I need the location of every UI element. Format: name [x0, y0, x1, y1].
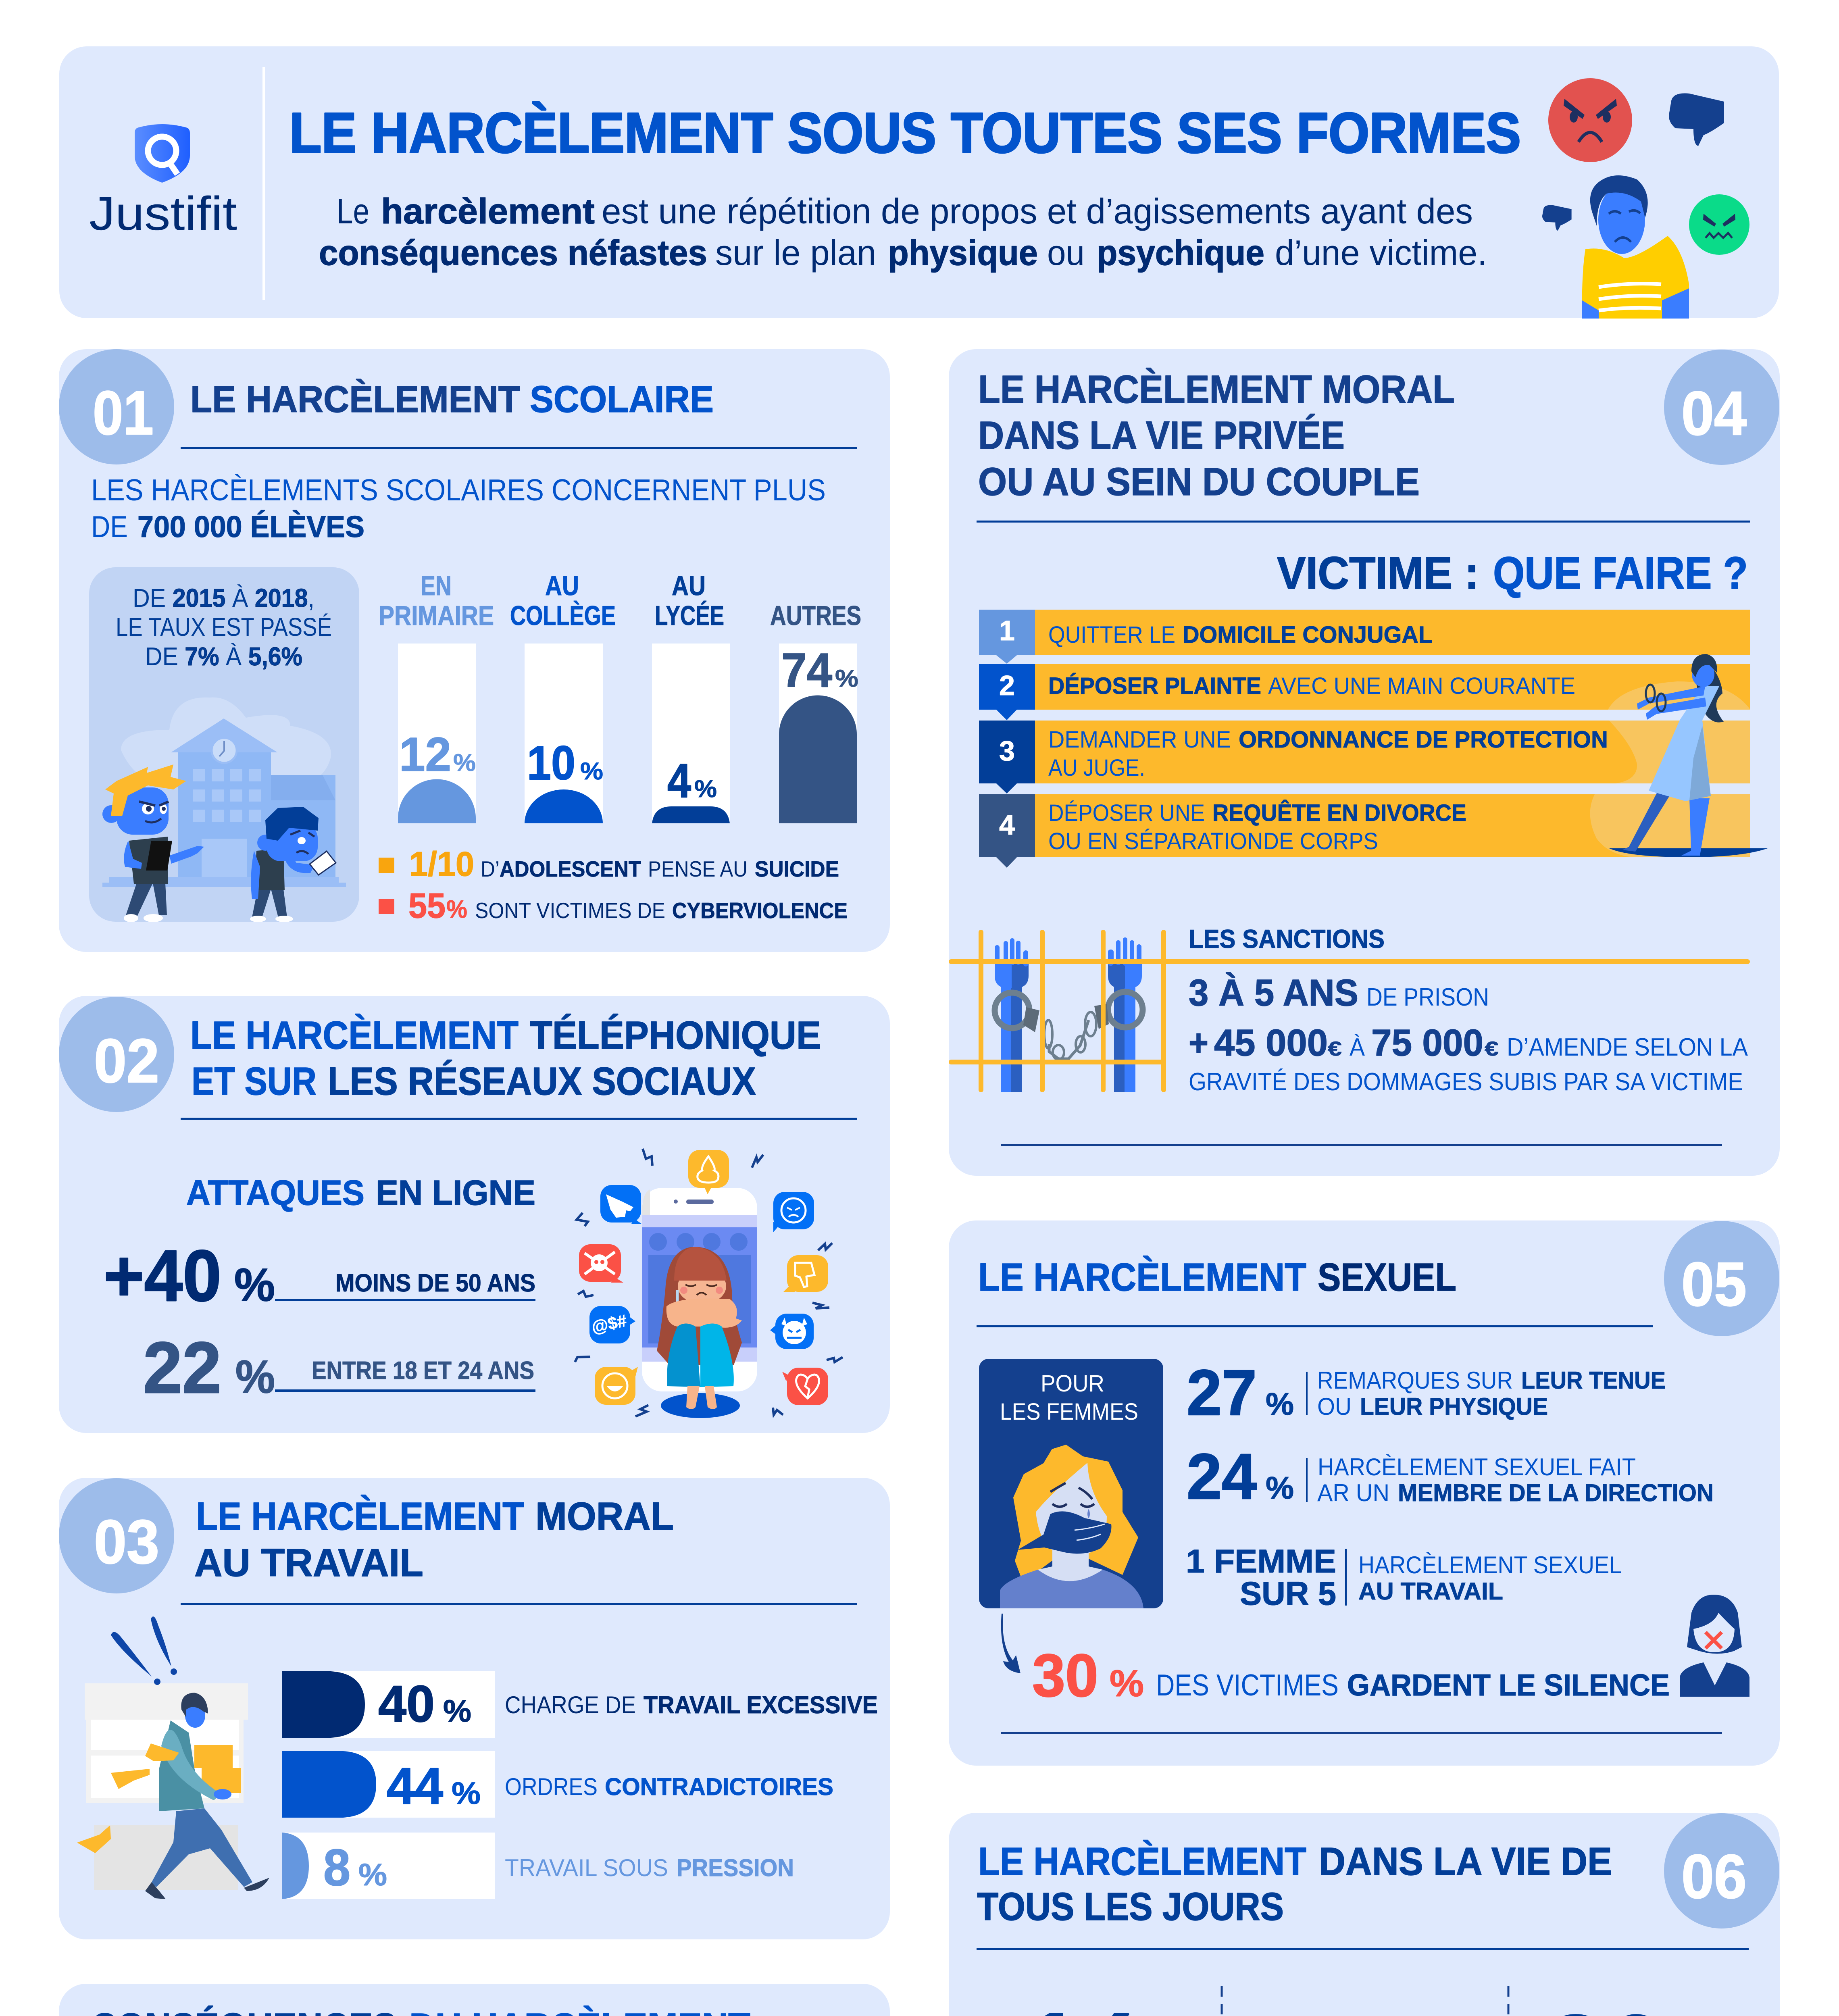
icon: shield: [135, 124, 190, 183]
step 4 text: [1048, 800, 1466, 854]
number badge 06: [1664, 1813, 1779, 1929]
panel 02: téléphonique et réseaux sociaux: [59, 996, 890, 1433]
intro text: physique: [888, 233, 1038, 273]
stat: 22%: 22: [143, 1327, 221, 1408]
heading: AU TRAVAIL: [194, 1541, 423, 1585]
step 4: [979, 794, 1750, 868]
stat: 22%: ENTRE 18 ET 24 ANS: [312, 1357, 534, 1385]
sanctions text: €: [1328, 1037, 1342, 1060]
logo: Justifit: [89, 124, 237, 240]
stat: 1/10: 1/10: [409, 845, 474, 883]
step 4 text: REQUÊTE EN DIVORCE: [1212, 800, 1466, 826]
text: 2015 à 2018: DE 2015 À 2018,: [133, 583, 314, 612]
figure: man: [145, 1693, 269, 1899]
intro text: sur le plan: [715, 233, 876, 273]
flying papers: [77, 1743, 179, 1853]
bar: primaire: PRIMAIRE: [379, 600, 494, 631]
stat: 1 femme sur 5: AU TRAVAIL: [1358, 1578, 1503, 1605]
card: taux: [89, 567, 359, 922]
step 3 text: DEMANDER UNE: [1048, 727, 1231, 753]
bar: lycée: 4: [667, 754, 691, 808]
logo: Justifit: Justifit: [89, 187, 237, 240]
intro text: psychique: [1097, 233, 1264, 273]
heading: DANS LA VIE PRIVÉE: [978, 413, 1345, 457]
heading: [91, 2005, 750, 2016]
stat: 30% silence: DES VICTIMES: [1156, 1668, 1339, 1702]
heading: TOUS LES JOURS: [977, 1885, 1284, 1929]
card: pour les femmes: POUR: [1041, 1370, 1104, 1397]
heading: victime que faire: [1277, 548, 1748, 598]
stat: 27%: REMARQUES SUR: [1317, 1367, 1513, 1394]
bar: 44%: ORDRES: [505, 1773, 598, 1800]
heading: [190, 378, 714, 420]
intro text: Le: [337, 191, 369, 231]
sanctions text: [1189, 924, 1748, 1096]
number badge 03: [59, 1478, 174, 1593]
bubble: broken heart: [782, 1368, 828, 1405]
stat: 22%: [143, 1327, 535, 1408]
intro text: DE: [91, 510, 128, 544]
stat: 1 femme sur 5: [1186, 1543, 1622, 1612]
number badge 04: [1664, 350, 1779, 465]
stat: 1 femme sur 5: 1 FEMME: [1186, 1543, 1336, 1580]
stat: 24%: AR UN: [1317, 1479, 1389, 1506]
sanctions text: GRAVITÉ DES DOMMAGES SUBIS PAR SA VICTIME: [1189, 1068, 1743, 1096]
step 1: [979, 610, 1750, 664]
illustration: overwhelmed worker: [77, 1616, 269, 1899]
bar: 40%: CHARGE DE: [505, 1691, 636, 1718]
bar: 40%: 40: [378, 1675, 435, 1733]
card: pour les femmes: LES FEMMES: [1000, 1399, 1138, 1425]
stat: 27%: LEUR PHYSIQUE: [1360, 1393, 1548, 1420]
intro text: LES HARCÈLEMENTS SCOLAIRES CONCERNENT PLUS: [91, 473, 826, 507]
text: 2015 à 2018: [116, 583, 332, 671]
heading: attaques en ligne: [186, 1173, 535, 1212]
number badge 01: 01: [93, 378, 154, 448]
intro text: conséquences néfastes: [319, 233, 707, 273]
icon: angry red face: [1548, 78, 1632, 162]
handcuffs: [995, 992, 1143, 1060]
panel 01: harcèlement scolaire: [59, 349, 890, 952]
panel 06: vie de tous les jours: [949, 1813, 1780, 2016]
heading: attaques en ligne: EN LIGNE: [376, 1173, 535, 1212]
stat: 1/10: PENSE AU: [648, 856, 748, 881]
prison bars: [949, 930, 1750, 1092]
stat: 24%: 24: [1187, 1440, 1257, 1512]
bar: 40%: TRAVAIL EXCESSIVE: [644, 1691, 878, 1718]
bar: 8%: PRESSION: [677, 1854, 794, 1881]
number badge 05: [1664, 1221, 1779, 1336]
number badge 01: [59, 349, 174, 464]
sanctions text: 75 000: [1371, 1022, 1483, 1064]
bar: autres: %: [835, 665, 858, 692]
step 4 text: OU EN SÉPARATIONDE CORPS: [1048, 828, 1378, 854]
stat: 55%: SONT VICTIMES DE: [475, 898, 665, 923]
intro text: harcèlement: [381, 191, 595, 231]
window and shelf: [85, 1683, 248, 1890]
stat: 22%: %: [235, 1351, 275, 1403]
panel 04: vie privée et couple: [949, 349, 1780, 1176]
stat: +40%: +40: [104, 1235, 221, 1316]
bubble: devil: [770, 1314, 814, 1349]
number badge 05: 05: [1681, 1250, 1747, 1319]
bar: 8%: TRAVAIL SOUS: [505, 1854, 668, 1881]
number badge 02: 02: [94, 1026, 159, 1095]
heading: LE HARCÈLEMENT: [978, 1255, 1306, 1299]
heading: victime que faire: QUE FAIRE ?: [1493, 548, 1748, 598]
stat: 24%: HARCÈLEMENT SEXUEL FAIT: [1318, 1454, 1636, 1481]
sanctions text: 3 À 5 ANS: [1189, 972, 1358, 1014]
bar: 44%: %: [452, 1776, 481, 1811]
bar: primaire: 12: [399, 728, 451, 781]
bar: 40%: %: [443, 1694, 471, 1729]
heading: [978, 367, 1455, 504]
illustration: silenced woman: [1000, 1445, 1143, 1608]
step 3: [979, 721, 1750, 793]
step 3 text: [1048, 727, 1608, 781]
bubble: angry face: [773, 1192, 814, 1232]
illustration: girl in phone: [575, 1149, 843, 1418]
number badge 04: 04: [1681, 379, 1747, 448]
step 3: 3: [999, 735, 1015, 766]
illustration: handcuffed hands behind bars: [949, 930, 1750, 1092]
chart: bars by school level: [379, 571, 861, 823]
exclamation marks: [111, 1616, 177, 1685]
step 2 text: [1048, 673, 1575, 699]
title: LE HARCÈLEMENT SOUS TOUTES SES FORMES: [289, 101, 1521, 165]
bar: collège: COLLÈGE: [510, 600, 616, 631]
bar: 8%: [282, 1833, 794, 1899]
panel: header: [59, 46, 1779, 319]
sanctions text: D’AMENDE SELON LA: [1507, 1033, 1748, 1061]
stat: 1 femme sur 5: HARCÈLEMENT SEXUEL: [1358, 1552, 1622, 1579]
heading: MORAL: [535, 1494, 674, 1538]
bar: autres: AUTRES: [770, 600, 861, 631]
text: 2015 à 2018: DE 7% À 5,6%: [145, 642, 302, 671]
stat: 55%: %: [446, 896, 467, 923]
stat: 1 femme sur 5: SUR 5: [1240, 1575, 1336, 1612]
bar: autres: 74: [781, 644, 832, 697]
intro text: 700 000 ÉLÈVES: [137, 510, 364, 544]
bar: lycée: AU: [672, 571, 706, 601]
bar: lycée: LYCÉE: [655, 600, 724, 631]
number badge 03: 03: [94, 1507, 159, 1577]
bar: 40%: [282, 1671, 878, 1738]
illustration: sad man: [1582, 175, 1689, 319]
bar: collège: 10: [527, 736, 575, 790]
heading: SCOLAIRE: [530, 378, 714, 420]
stat: 24%: MEMBRE DE LA DIRECTION: [1398, 1479, 1714, 1506]
stat: 30% silence: GARDENT LE SILENCE: [1347, 1668, 1670, 1702]
step 2 text: DÉPOSER PLAINTE: [1048, 673, 1261, 699]
heading: [977, 1839, 1612, 1929]
heading: TÉLÉPHONIQUE: [530, 1013, 821, 1057]
sanctions text: À: [1350, 1033, 1365, 1061]
bubble: swear symbols: @$#: [590, 1311, 629, 1337]
bar: primaire: EN: [421, 571, 452, 601]
bubble: poop: [688, 1150, 729, 1194]
step 4: 4: [999, 809, 1015, 841]
arrow: [1001, 1614, 1021, 1673]
bar: primaire: %: [453, 749, 476, 776]
number badge 06: 06: [1681, 1842, 1747, 1911]
icon: small thumbs down: [1542, 205, 1572, 231]
card: pour les femmes: [979, 1359, 1163, 1608]
heading: LE HARCÈLEMENT: [978, 1839, 1306, 1883]
bubble: thumbs down: [783, 1255, 828, 1292]
icon: silenced woman: [1680, 1595, 1749, 1697]
stat: 55%: [379, 886, 848, 925]
panel 03: harcèlement moral au travail: [59, 1478, 890, 1939]
panel 05: harcèlement sexuel: [949, 1220, 1780, 1766]
step 2: [979, 664, 1750, 720]
bar: primaire: [379, 571, 494, 823]
illustration: school: [102, 698, 346, 887]
stat: 30% silence: [1032, 1641, 1670, 1709]
stat: 24%: [1187, 1440, 1714, 1512]
step 3 text: ORDONNANCE DE PROTECTION: [1239, 727, 1608, 753]
bubble: swear symbols: [589, 1306, 635, 1343]
stat: 27%: OU: [1317, 1393, 1352, 1420]
bubble: pointing hand: [600, 1185, 642, 1224]
stat: 27%: LEUR TENUE: [1521, 1367, 1666, 1394]
sanctions text: €: [1485, 1037, 1499, 1060]
icon: thumbs down: [1669, 93, 1724, 146]
intro text: [91, 473, 826, 544]
bar: 44%: CONTRADICTOIRES: [605, 1773, 833, 1800]
heading: LE HARCÈLEMENT: [190, 378, 520, 420]
intro text: est une répétition de propos et d’agissements ayant des: [602, 191, 1473, 231]
bar: 8%: %: [358, 1858, 387, 1892]
illustration: bully kid: [102, 764, 204, 922]
text: 2015 à 2018: LE TAUX EST PASSÉ: [116, 612, 332, 641]
heading: OU AU SEIN DU COUPLE: [978, 460, 1420, 504]
heading: LE HARCÈLEMENT: [196, 1494, 524, 1538]
sanctions text: +: [1189, 1022, 1208, 1064]
bar: autres: [770, 600, 861, 823]
bar: collège: %: [580, 758, 603, 785]
bar: lycée: [652, 571, 730, 823]
sanctions text: LES SANCTIONS: [1189, 924, 1385, 954]
step 1: 1: [999, 615, 1015, 646]
heading: LE HARCÈLEMENT MORAL: [978, 367, 1455, 411]
sanctions text: 45 000: [1214, 1022, 1328, 1064]
stat: 1/10: D’: [481, 856, 500, 881]
bar: collège: [510, 571, 616, 823]
stat: 1/10: ADOLESCENT: [500, 856, 641, 881]
stat: 1/10: SUICIDE: [755, 856, 839, 881]
intro text: d’une victime.: [1275, 233, 1487, 273]
stat: 55%: CYBERVIOLENCE: [672, 898, 848, 923]
stat: 27%: [1187, 1356, 1666, 1429]
heading: DANS LA VIE DE: [1319, 1839, 1612, 1883]
icon: green face: [1689, 194, 1749, 255]
bubble: skull: [579, 1244, 623, 1283]
stat: 27%: %: [1266, 1386, 1294, 1422]
stat: +40%: MOINS DE 50 ANS: [335, 1269, 535, 1297]
bar: lycée: %: [694, 775, 717, 802]
panel: conséquences: [59, 1984, 890, 2016]
number badge 02: [59, 997, 174, 1112]
step 4 text: DÉPOSER UNE: [1048, 800, 1205, 826]
heading: victime que faire: VICTIME :: [1277, 548, 1479, 598]
stat: 55%: 55: [408, 886, 446, 925]
step 2: 2: [999, 670, 1015, 701]
heading: LE HARCÈLEMENT: [190, 1013, 519, 1057]
stat: +40%: %: [234, 1259, 275, 1311]
heading: LES RÉSEAUX SOCIAUX: [328, 1059, 756, 1103]
stat: 30% silence: 30: [1032, 1641, 1098, 1709]
icon: angry message bubbles: [579, 1150, 828, 1405]
intro text: [319, 191, 1487, 273]
bubble: grin: [595, 1367, 638, 1405]
step 1: DOMICILE CONJUGAL: [1183, 622, 1433, 648]
steps list: [979, 610, 1750, 868]
icon: lightning squiggles: [575, 1149, 843, 1416]
stat: 24%: %: [1266, 1470, 1294, 1506]
heading: SEXUEL: [1318, 1255, 1456, 1299]
stat: 30% silence: %: [1110, 1662, 1144, 1704]
stat: 1/10: [379, 845, 839, 883]
figure: crying girl: [657, 1247, 742, 1409]
icon: phone: [642, 1188, 757, 1391]
stat: +40%: [104, 1235, 535, 1316]
heading: ET SUR: [192, 1059, 317, 1103]
step 1: QUITTER LE: [1048, 622, 1175, 648]
illustration: woman with bracelets: [1609, 654, 1768, 857]
bar: collège: AU: [545, 571, 579, 601]
stat: 27%: 27: [1187, 1356, 1257, 1429]
intro text: ou: [1047, 233, 1085, 273]
heading: [190, 1013, 821, 1103]
step 2 text: AVEC UNE MAIN COURANTE: [1268, 673, 1575, 699]
sanctions text: DE PRISON: [1366, 983, 1489, 1011]
bar: 44%: 44: [387, 1758, 443, 1815]
bar: 8%: 8: [323, 1839, 350, 1897]
heading: [194, 1494, 674, 1585]
bar: 44%: [282, 1751, 833, 1818]
illustration: victim kid: [250, 807, 336, 922]
heading: attaques en ligne: ATTAQUES: [186, 1173, 364, 1212]
step 3 text: AU JUGE.: [1048, 755, 1145, 781]
arms: [995, 937, 1142, 1092]
